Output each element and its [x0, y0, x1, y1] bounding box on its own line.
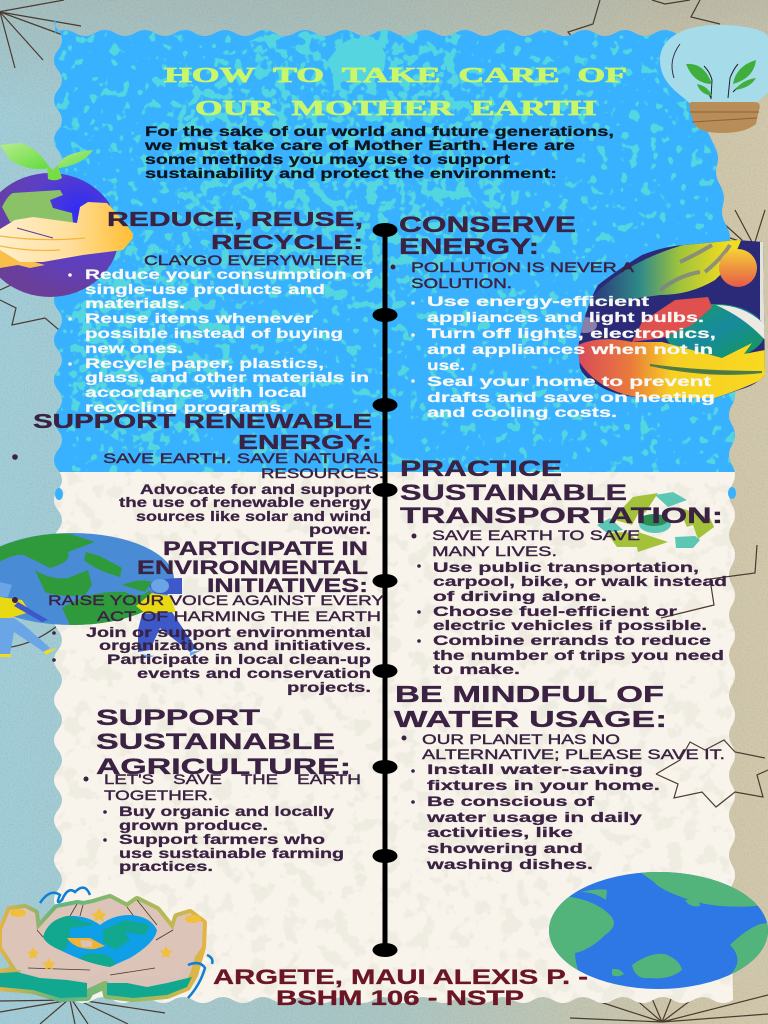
section: conserve energy: Use energy-efficient [427, 293, 650, 309]
section: reduce, reuse, recycle: materials. [85, 295, 185, 311]
section: support renewable energy [12, 411, 384, 537]
section: be mindful of water usage: showering and [427, 840, 583, 856]
section: be mindful of water usage: Be conscious of [427, 793, 595, 809]
section: support sustainable agriculture: use sustainable farming [119, 845, 344, 861]
section: conserve energy: CONSERVE [399, 212, 576, 237]
section: be mindful of water usage: OUR PLANET HAS NO [422, 731, 620, 747]
icon: hands holding heart earth [0, 888, 212, 998]
section: practice sustainable transportation: carpool, bike, or walk instead [433, 573, 727, 589]
section: practice sustainable transportation: SAVE EARTH TO SAVE [432, 527, 640, 543]
title: HOW TO TAKE CARE OF [164, 63, 627, 87]
title [164, 63, 627, 120]
section: practice sustainable transportation: Combine errands to reduce [433, 632, 711, 648]
section: support sustainable agriculture: THE [241, 771, 278, 787]
section: support sustainable agriculture: LET'S [104, 771, 154, 787]
section: support sustainable agriculture [84, 705, 361, 874]
intro text block: some methods you may use to support [145, 151, 510, 167]
section: support sustainable agriculture: Support farmers who [119, 831, 325, 847]
section: reduce, reuse, recycle: Recycle paper, plastics, [85, 355, 324, 371]
section: support sustainable agriculture: SAVE [173, 771, 222, 787]
section: conserve energy [390, 212, 716, 420]
section: participate in environmental initiatives: RAISE YOUR VOICE AGAINST EVERY [48, 592, 385, 608]
section: conserve energy: Seal your home to prevent [427, 373, 712, 389]
section: support sustainable agriculture: Buy organic and locally [119, 803, 334, 819]
icon: small blue drops at paper edges [55, 487, 736, 500]
section: support sustainable agriculture: practices. [119, 858, 213, 874]
section: practice sustainable transportation: Use public transportation, [433, 559, 699, 575]
section: be mindful of water usage: activities, like [427, 824, 573, 840]
illustration: globe with two people [0, 533, 202, 658]
section: conserve energy: and cooling costs. [427, 404, 617, 420]
section: participate in environmental initiatives: projects. [287, 679, 371, 695]
section: reduce, reuse, recycle: CLAYGO EVERYWHERE [144, 252, 363, 268]
section: support sustainable agriculture: TOGETHER. [104, 787, 213, 803]
section: practice sustainable transportation: electric vehicles if possible. [433, 617, 707, 633]
section: support sustainable agriculture: EARTH [297, 771, 361, 787]
star and squiggle line art [656, 545, 768, 807]
section: be mindful of water usage: ALTERNATIVE; PLEASE SAVE IT. [422, 746, 725, 762]
section: be mindful of water usage: Install water-saving [427, 761, 643, 777]
section: conserve energy: and appliances when not in [427, 341, 713, 357]
section: support sustainable agriculture: SUSTAINABLE [96, 729, 335, 754]
section: practice sustainable transportation: Choose fuel-efficient or [433, 603, 678, 619]
section: practice sustainable transportation: of driving alone. [433, 588, 607, 604]
section: practice sustainable transportation: MANY LIVES. [432, 543, 557, 559]
section: be mindful of water usage [394, 681, 725, 872]
icon: lightbulb with leaves [660, 25, 768, 133]
title: OUR MOTHER EARTH [195, 96, 596, 120]
footer: author credit: ARGETE, MAUI ALEXIS P. - [213, 966, 588, 989]
section: conserve energy: ENERGY: [399, 234, 539, 259]
section: support renewable energy: SAVE EARTH. SAVE NATURAL [103, 450, 384, 466]
section: reduce, reuse, recycle: glass, and other materials in [85, 369, 369, 385]
section: participate in environmental initiatives: organizations and initiatives. [99, 637, 371, 653]
section: be mindful of water usage: water usage in daily [425, 809, 642, 825]
section: support renewable energy: the use of renewable energy [119, 494, 371, 510]
icon: plant globe held in hand [0, 143, 133, 297]
section: reduce, reuse, recycle: single-use products and [85, 281, 325, 297]
section: reduce, reuse, recycle: Reuse items whenever [85, 310, 314, 326]
section: conserve energy: drafts and save on heating [427, 389, 715, 405]
section: support renewable energy: power. [309, 521, 371, 537]
section: practice sustainable transportation: SUSTAINABLE [400, 480, 627, 505]
intro text block: sustainability and protect the environment: [145, 165, 557, 181]
section: conserve energy: appliances and light bulbs. [427, 309, 704, 325]
intro text block [144, 123, 614, 181]
icon: recycling arrows [597, 492, 714, 552]
timeline with nine nodes [372, 223, 398, 957]
section: support renewable energy: ENERGY: [238, 432, 372, 454]
illustration: mother earth woman [573, 238, 767, 400]
section: participate in environmental initiatives: ACT OF HARMING THE EARTH [97, 608, 381, 624]
section: conserve energy: POLLUTION IS NEVER A [411, 259, 635, 275]
section: participate in environmental initiatives: ENVIRONMENTAL [137, 558, 369, 579]
section: participate in environmental initiatives: Join or support environmental [86, 624, 371, 640]
section: reduce, reuse, recycle: Reduce your consumption of [85, 266, 372, 282]
section: reduce, reuse, recycle: accordance with local [85, 384, 307, 400]
icon: earth globe bottom right [545, 872, 768, 990]
section: be mindful of water usage: WATER USAGE: [394, 706, 667, 732]
section: conserve energy: use. [427, 357, 465, 373]
section: practice sustainable transportation: TRANSPORTATION: [400, 503, 723, 528]
section: participate in environmental initiatives: PARTICIPATE IN [163, 539, 368, 560]
section: practice sustainable transportation: to make. [433, 661, 520, 677]
section: reduce, reuse, recycle: RECYCLE: [211, 232, 363, 254]
section: practice sustainable transportation: the number of trips you need [433, 647, 724, 663]
footer: author credit: BSHM 106 - NSTP [276, 987, 524, 1010]
section: support sustainable agriculture: SUPPORT [96, 705, 261, 730]
section: support renewable energy: SUPPORT RENEWABLE [33, 411, 372, 433]
section: support renewable energy: sources like solar and wind [136, 508, 371, 524]
section: be mindful of water usage: BE MINDFUL OF [395, 681, 664, 707]
section: conserve energy: Turn off lights, electronics, [427, 325, 716, 341]
section: participate in environmental initiatives: Participate in local clean-up [107, 651, 371, 667]
section: participate in environmental initiatives: INITIATIVES: [207, 576, 368, 597]
section: reduce, reuse, recycle: REDUCE, REUSE, [107, 209, 363, 231]
section: conserve energy: SOLUTION. [411, 275, 512, 291]
section: participate in environmental initiatives: events and conservation [137, 665, 371, 681]
section: reduce, reuse, recycle [68, 209, 372, 415]
section: reduce, reuse, recycle: possible instead of buying [85, 325, 343, 341]
section: support sustainable agriculture: AGRICULTURE: [96, 754, 351, 779]
section: reduce, reuse, recycle: recycling programs. [85, 399, 287, 415]
section: participate in environmental initiatives [48, 539, 385, 695]
intro text block: we must take care of Mother Earth. Here are [144, 137, 575, 153]
section: reduce, reuse, recycle: new ones. [85, 340, 183, 356]
intro text block: For the sake of our world and future generations, [145, 123, 614, 139]
section: be mindful of water usage: fixtures in your home. [427, 777, 660, 793]
section: practice sustainable transportation [400, 456, 727, 677]
section: support renewable energy: RESOURCES. [261, 465, 384, 481]
section: support sustainable agriculture: grown produce. [119, 817, 268, 833]
section: be mindful of water usage: washing dishes. [425, 856, 593, 872]
section: practice sustainable transportation: PRACTICE [400, 456, 562, 481]
section: support renewable energy: Advocate for and support [140, 481, 371, 497]
footer: author credit [213, 966, 588, 1010]
